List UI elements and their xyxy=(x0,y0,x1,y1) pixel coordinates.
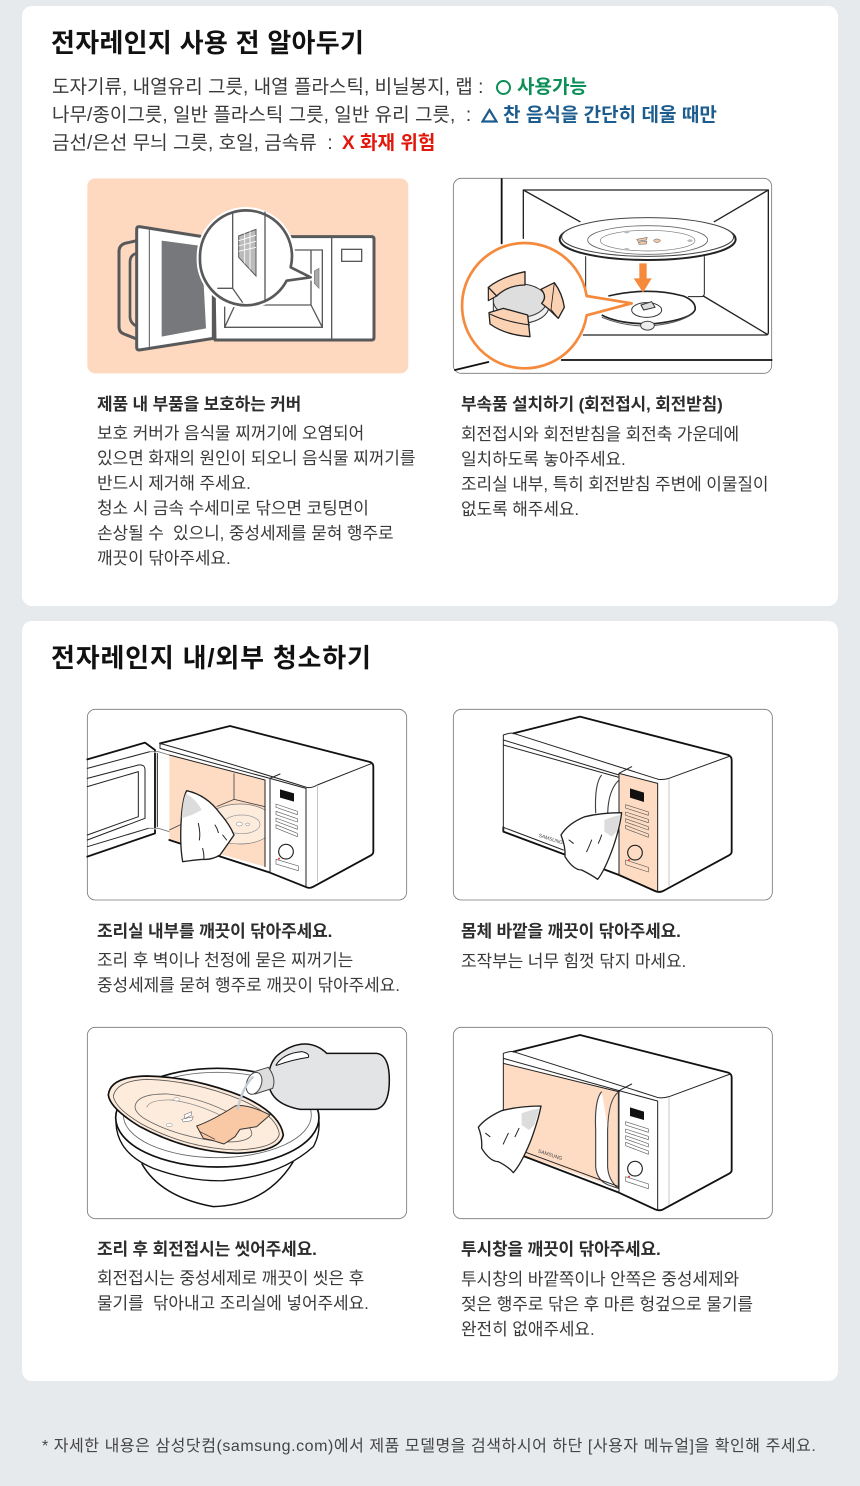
body: 젖은 행주로 닦은 후 마른 헝겊으로 물기를 xyxy=(461,1295,753,1314)
body: 반드시 제거해 주세요. xyxy=(97,474,251,493)
body: 보호 커버가 음식물 찌꺼기에 오염되어 xyxy=(97,424,364,443)
text block: cavity cleaning xyxy=(97,922,400,995)
title: cleaning: 전자레인지 내/외부 청소하기 xyxy=(51,643,372,673)
body: 회전접시와 회전받침을 회전축 가운데에 xyxy=(461,425,739,444)
body xyxy=(461,1270,753,1339)
text block: window cleaning xyxy=(461,1240,753,1339)
heading: 몸체 바깥을 깨끗이 닦아주세요. xyxy=(461,922,681,941)
body: 깨끗이 닦아주세요. xyxy=(97,549,231,568)
illustration: cleaning the door window: SAMSUNG xyxy=(537,1149,563,1162)
body: 완전히 없애주세요. xyxy=(461,1320,595,1339)
icon: limited triangle xyxy=(481,108,498,123)
panel: cleaning xyxy=(22,621,838,1381)
body xyxy=(97,424,415,568)
illustration: turntable installation xyxy=(452,178,772,374)
body: 손상될 수 있으니, 중성세제를 묻혀 행주로 xyxy=(97,524,394,543)
text block: container safety list: 사용가능 xyxy=(517,77,587,98)
body: 투시창의 바깥쪽이나 안쪽은 중성세제와 xyxy=(461,1270,739,1289)
heading: 조리 후 회전접시는 씻어주세요. xyxy=(97,1240,317,1259)
body: 일치하도록 놓아주세요. xyxy=(461,450,626,469)
text block: turntable washing xyxy=(97,1240,369,1313)
text block: container safety list xyxy=(52,77,717,154)
body: 중성세제를 묻혀 행주로 깨끗이 닦아주세요. xyxy=(97,976,400,995)
footnote: * 자세한 내용은 삼성닷컴(samsung.com)에서 제품 모델명을 검색하시어 하단 [사용자 메뉴얼]을 확인해 주세요. xyxy=(42,1438,816,1455)
illustration: cleaning the door window xyxy=(452,1026,773,1220)
icon: available circle xyxy=(496,80,511,95)
illustration: cleaning the control panel: SAMSUNG xyxy=(538,833,564,846)
text block: container safety list: 찬 음식을 간단히 데울 때만 xyxy=(503,105,717,126)
heading: 제품 내 부품을 보호하는 커버 xyxy=(97,395,301,414)
body: 없도록 해주세요. xyxy=(461,500,579,519)
body: 조리실 내부, 특히 회전받침 주변에 이물질이 xyxy=(461,475,768,494)
heading: 투시창을 깨끗이 닦아주세요. xyxy=(461,1240,661,1259)
heading: 조리실 내부를 깨끗이 닦아주세요. xyxy=(97,922,332,941)
text block: accessories xyxy=(461,395,768,519)
text block: container safety list: 금선/은선 무늬 그릇, 호일, 금속류 : xyxy=(52,133,333,154)
body: 조작부는 너무 힘껏 닦지 마세요. xyxy=(461,952,686,971)
text block: container safety list: 나무/종이그릇, 일반 플라스틱 그릇, 일반 유리 그릇, : xyxy=(52,105,471,126)
illustration: cover protecting parts xyxy=(87,178,408,374)
text block: protective cover xyxy=(97,395,415,568)
body: 물기를 닦아내고 조리실에 넣어주세요. xyxy=(97,1294,369,1313)
text block: container safety list: X 화재 위험 xyxy=(342,133,435,154)
body: 있으면 화재의 원인이 되오니 음식물 찌꺼기를 xyxy=(97,449,415,468)
illustration: washing the turntable xyxy=(86,1026,408,1220)
body xyxy=(461,425,768,519)
title: before use: 전자레인지 사용 전 알아두기 xyxy=(51,28,364,58)
body: 조리 후 벽이나 천정에 묻은 찌꺼기는 xyxy=(97,951,353,970)
body xyxy=(97,1269,369,1313)
body: 회전접시는 중성세제로 깨끗이 씻은 후 xyxy=(97,1269,364,1288)
body: 청소 시 금속 수세미로 닦으면 코팅면이 xyxy=(97,499,369,518)
text block: container safety list: 도자기류, 내열유리 그릇, 내열 플라스틱, 비닐봉지, 랩 : xyxy=(52,77,483,98)
illustration: cleaning the cavity xyxy=(86,708,408,900)
panel: before use xyxy=(22,6,838,606)
text block: exterior cleaning xyxy=(461,922,686,971)
illustration: cleaning the control panel xyxy=(452,708,773,900)
heading: 부속품 설치하기 (회전접시, 회전받침) xyxy=(461,395,723,414)
body xyxy=(97,951,400,995)
